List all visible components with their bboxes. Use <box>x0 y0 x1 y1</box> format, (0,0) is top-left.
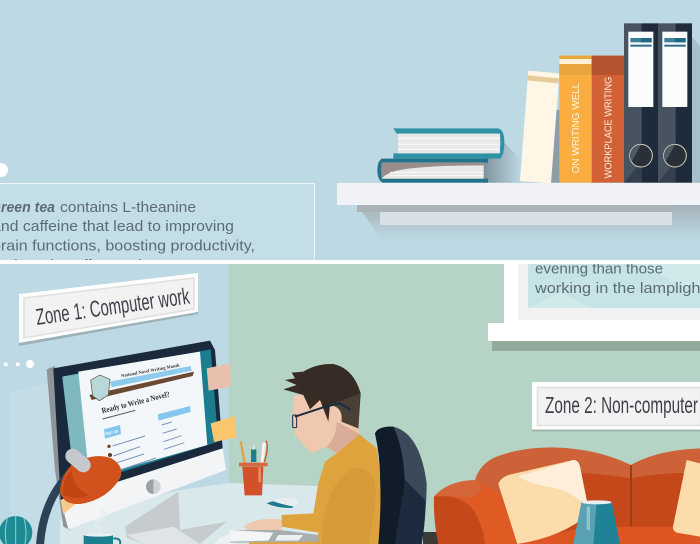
stacked books <box>377 128 504 183</box>
cushion left <box>498 460 589 544</box>
web page on screen <box>89 363 194 472</box>
books on shelf <box>377 23 700 183</box>
sticky note: yellow <box>211 416 237 442</box>
window with text: working in the lamplight <box>534 280 700 297</box>
chair <box>372 427 427 544</box>
coffee cup with steam <box>84 534 122 544</box>
sofa group <box>434 447 700 544</box>
red book: Workplace Writing: WORKPLACE WRITING <box>604 77 615 178</box>
orange book: On Writing Well <box>559 56 592 183</box>
cream book <box>520 71 559 183</box>
orange book: On Writing Well: ON WRITING WELL <box>571 82 582 173</box>
desk lamp <box>40 456 121 544</box>
sofa seat <box>513 527 700 544</box>
text panel: green tea: contains L-theanine <box>60 199 196 216</box>
man <box>243 364 380 544</box>
sticky note: pink <box>207 363 231 391</box>
desk <box>60 483 320 544</box>
mouse <box>267 498 298 508</box>
sign: Zone 2 <box>532 382 700 432</box>
soft wall shadow <box>10 380 70 544</box>
web page on screen: Sign up <box>104 428 119 436</box>
web page on screen: National Novel Writing Month <box>121 363 180 379</box>
man at desk group <box>230 364 427 544</box>
cactus <box>0 516 32 544</box>
window with text <box>488 260 700 351</box>
pen cup <box>239 441 268 495</box>
floor <box>423 532 438 544</box>
section divider <box>0 260 700 264</box>
red book: Workplace Writing <box>592 56 624 183</box>
panel: upper bookshelf scene <box>0 23 700 274</box>
monitor and desk lamp group <box>0 341 237 544</box>
text panel: green tea <box>0 183 315 260</box>
sign: Zone 1 <box>19 273 198 346</box>
panel: lower office scene <box>0 260 700 544</box>
keyboard left part <box>215 534 235 544</box>
binder one <box>624 23 658 183</box>
table lamp shade <box>573 500 620 544</box>
cushion right <box>673 460 700 537</box>
keyboard <box>230 530 318 543</box>
binder two <box>658 23 692 183</box>
web page on screen: Ready to Write a Novel? <box>101 390 171 415</box>
sign: Zone 1: Zone 1: Computer work <box>34 283 192 330</box>
window with text: evening than those <box>535 260 663 278</box>
sofa armrest <box>434 480 517 544</box>
monitor stand <box>125 492 227 544</box>
green wall <box>229 264 700 544</box>
monitor <box>47 341 226 530</box>
sofa back <box>475 447 700 544</box>
timeline dots <box>4 360 34 368</box>
timeline dot <box>0 163 8 177</box>
shelf with bracket <box>337 183 700 234</box>
